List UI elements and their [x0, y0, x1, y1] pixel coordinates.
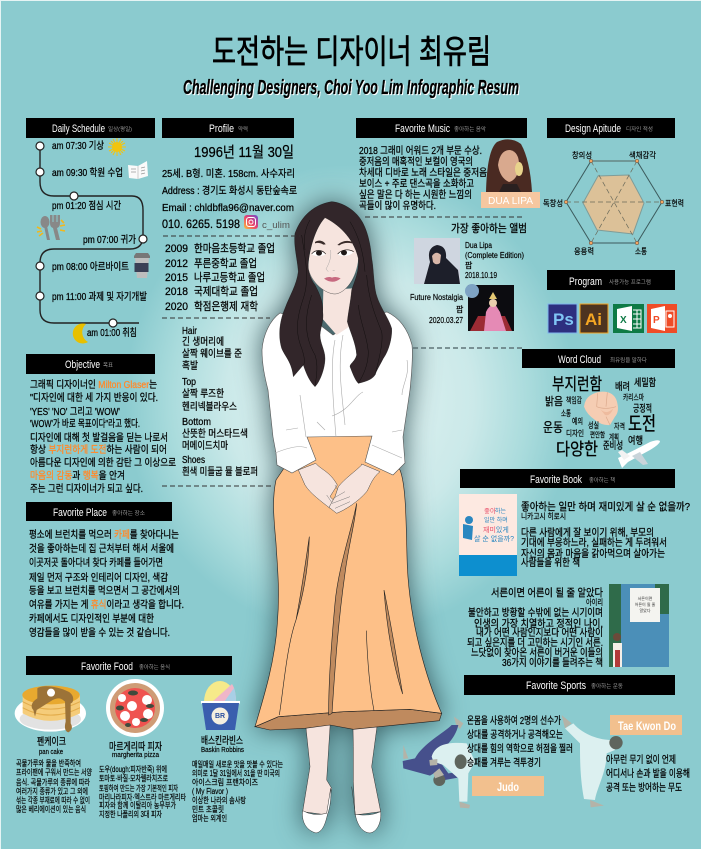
- place text: 제일 먼저 구조와 인테리어 디자인, 색감: [29, 572, 168, 584]
- pan cake description: 많은 베리에이션이 있는 음식: [16, 804, 86, 814]
- taekwondo description: 아무런 무기 없이 언제: [606, 753, 676, 766]
- personal details: [162, 167, 297, 231]
- book 2 description: 인생의 가장 치열하고 정적인 나이,: [474, 617, 603, 630]
- schedule entries: am 01:00 취침: [87, 327, 137, 339]
- word cloud words: 책임감: [566, 395, 582, 405]
- personal details: Address : 경기도 화성시 동탄숲속로: [162, 184, 297, 197]
- education history: [165, 242, 275, 313]
- panel: favorite place: [26, 502, 184, 639]
- panel: daily schedule: [26, 118, 155, 343]
- face and neck: [308, 217, 358, 335]
- judo description: 상대를 공격하거나 공격해오는: [467, 728, 563, 741]
- icon: moon: [73, 323, 88, 343]
- illustration: judo: [403, 717, 475, 808]
- favorite album heading: 가장 좋아하는 앨범: [451, 221, 527, 235]
- outfit description: Shoes: [182, 455, 205, 466]
- icon: book: [128, 161, 148, 179]
- margherita pizza label: margherita pizza: [112, 752, 159, 759]
- education history: 2009: [165, 243, 188, 255]
- schedule entries: pm 01:20 점심 시간: [52, 200, 121, 212]
- outfit description: 흑발: [182, 359, 198, 372]
- album info: Future Nostalgia: 팝: [456, 304, 464, 314]
- word cloud words: 긍정적: [633, 403, 652, 415]
- outfit description: Bottom: [182, 417, 211, 428]
- baskin robbins description: 의미로 1달 31일에서 31을 딴 미국의: [192, 768, 280, 778]
- word cloud words: 세밀함: [634, 377, 656, 389]
- title: 도전하는 디자이너 최유림: [212, 33, 491, 70]
- outfit description: 헨리넥블라우스: [182, 401, 237, 413]
- album cover: Future Nostalgia: [465, 284, 514, 331]
- panel: favorite book: [459, 469, 690, 669]
- book 2 description: 불안하고 방황할 수밖에 없는 시기이며: [468, 606, 603, 619]
- icon: spoon and fork: [37, 215, 65, 240]
- objective text: 디자인에 대해 첫 발걸음을 딛는 나로서: [30, 431, 168, 444]
- radar chart: 창의성: [572, 150, 592, 160]
- heading: daily schedule: 일상(평일): [108, 125, 132, 133]
- pan cake label: [37, 736, 66, 756]
- pan cake description: [16, 758, 92, 814]
- album info: Dua Lipa: 2018.10.19: [465, 271, 497, 280]
- heading: design aptitude: [547, 118, 675, 138]
- book 1 author: 니카고시 히로시: [521, 511, 566, 521]
- heading: favorite book: [460, 469, 675, 488]
- baskin robbins description: 매일매일 새로운 맛을 맛볼 수 있다는: [192, 759, 283, 769]
- heading: word cloud: [522, 349, 675, 368]
- icon: ice cream: [201, 681, 240, 730]
- blouse: [262, 312, 412, 475]
- music text: 싶은 말은 다 하는 시원한 느낌의: [359, 188, 472, 201]
- baskin robbins description: ( My Flavor ): [192, 787, 228, 796]
- heading: favorite food: Favorite Food: [81, 661, 133, 673]
- album info: Dua Lipa: (Complete Edition): [465, 251, 524, 260]
- hair: [280, 202, 392, 387]
- baskin robbins description: 아이스크림 프랜차이즈: [192, 777, 258, 787]
- heading: design aptitude: Design Apitude: [565, 123, 621, 135]
- margherita pizza description: 토마토·바질·모차렐라치즈로: [99, 773, 168, 783]
- margherita pizza label: [109, 741, 162, 759]
- baskin robbins label: Baskin Robbins: [201, 747, 244, 754]
- icon: Illustrator: Ai: [585, 310, 602, 329]
- figure: woman illustration: [255, 202, 442, 833]
- panel: profile: [162, 118, 300, 486]
- music text: [359, 144, 487, 212]
- book 1 description: 기대에 부응하느라, 실패하는 게 두려워서: [521, 536, 667, 549]
- place text: 여유를 가지는 게 휴식이라고 생각을 합니다.: [29, 599, 184, 611]
- pan cake description: 섞는 각종 부재료에 따라 수 없이: [16, 795, 90, 805]
- radar chart: 응용력: [574, 246, 594, 256]
- pan cake description: 여러가지 종류가 있고 그 외에: [16, 786, 88, 796]
- place text: 것을 좋아하는데 집 근처부터 해서 서울에: [29, 542, 174, 555]
- book cover 2: 서른이면: [638, 595, 653, 601]
- judo description: 승패를 겨루는 격투경기: [467, 756, 541, 769]
- pan cake description: 프라이팬에 구워서 만드는 서양: [16, 767, 92, 777]
- margherita pizza description: 피자와 함께 이탈리아 농무부가: [99, 800, 176, 810]
- margherita pizza description: 토핑하여 만드는 가장 기본적인 피자: [99, 783, 178, 793]
- album info: Dua Lipa: Dua Lipa: [465, 241, 492, 250]
- word cloud words: 배려: [615, 381, 630, 393]
- objective text: 그래픽 디자이너인 Milton Glaser는: [30, 379, 157, 391]
- pan cake label: pan cake: [39, 749, 63, 756]
- album info: Future Nostalgia: [410, 293, 464, 325]
- panel: objective: [26, 354, 176, 495]
- heading: daily schedule: [26, 118, 155, 138]
- pan cake description: 음식. 곡물가루의 종류에 따라: [16, 777, 90, 787]
- illustration: taekwondo: [562, 715, 623, 807]
- icon: pancake: [15, 686, 86, 732]
- heading: objective: 목표: [103, 362, 113, 369]
- book 2 title: 서른이면 어른이 될 줄 알았다: [491, 587, 603, 599]
- music text: 중저음의 매혹적인 보컬이 영국의: [359, 155, 473, 168]
- word cloud words: 소통: [561, 409, 571, 418]
- book cover 2: 어른이 될 줄: [635, 601, 656, 607]
- personal details: Email : chldbfla96@naver.com: [162, 203, 294, 214]
- objective text: 주는 그런 디자이너가 되고 싶다.: [30, 483, 143, 495]
- outfit description: Top: [182, 377, 196, 388]
- margherita pizza description: 지정한 나폴리의 3대 피자: [99, 809, 162, 819]
- music text: 2018 그래미 어워드 2개 부문 수상.: [359, 144, 482, 157]
- education history: 국제대학교 졸업: [194, 285, 258, 298]
- skirt: [255, 433, 442, 730]
- baskin robbins label: [201, 735, 244, 754]
- album info: Dua Lipa: [465, 241, 524, 280]
- objective text: [30, 379, 176, 495]
- objective text: 'YES' 'NO' 그리고 'WOW': [30, 406, 120, 418]
- music text: 곡들이 많이 유명하다.: [359, 199, 436, 212]
- icon: coffee cup: [134, 253, 150, 278]
- objective text: 'WOW'가 바로 목표이다"라고 했다.: [30, 417, 140, 430]
- education history: 한마음초등학교 졸업: [194, 242, 275, 255]
- margherita pizza description: [99, 765, 186, 819]
- book 2 author: 아이리: [586, 597, 603, 607]
- heading: favorite book: Favorite Book: [530, 474, 582, 486]
- heading: favorite music: Favorite Music: [395, 123, 450, 135]
- heading: word cloud: Word Cloud: [558, 354, 601, 366]
- word cloud words: 다양한: [556, 440, 598, 459]
- pan cake label: 펜케이크: [37, 736, 66, 748]
- album info: Future Nostalgia: Future Nostalgia: [410, 293, 463, 302]
- place text: 영감들을 많이 받을 수 있는 것 같습니다.: [29, 627, 170, 639]
- album info: Future Nostalgia: 2020.03.27: [429, 316, 463, 325]
- icon: ice cream: BR: [215, 713, 225, 720]
- place text: [29, 529, 184, 639]
- word cloud words: 여행: [628, 435, 643, 447]
- book cover 2: [609, 584, 669, 667]
- heading: favorite food: [26, 656, 232, 675]
- heading: word cloud: 최유림을 말하다: [610, 356, 647, 364]
- outfit description: Hair: [182, 326, 198, 337]
- icon: sun: [108, 138, 126, 156]
- label: Judo: [472, 776, 544, 796]
- book 1 description: 자신의 몸과 마음을 갉아먹으며 살아가는: [521, 547, 665, 560]
- schedule entries: pm 08:00 아르바이트: [52, 261, 129, 273]
- word cloud words: [543, 375, 656, 459]
- personal details: 010. 6265. 5198: [162, 217, 240, 231]
- radar chart: [543, 150, 684, 256]
- heading: favorite sports: 좋아하는 운동: [591, 682, 623, 690]
- heading: daily schedule: Daily Schedule: [52, 123, 105, 135]
- heading: favorite food: 좋아하는 음식: [139, 663, 170, 671]
- outfit description: 산뜻한 머스타드색: [182, 428, 248, 440]
- book cover 1: 재미있게: [483, 525, 509, 534]
- panel: favorite sports: [403, 675, 690, 808]
- place text: 카페에서도 디자인적인 부분에 대한: [29, 613, 154, 625]
- panel: word cloud: [522, 349, 675, 468]
- place text: 이곳저곳 돌아다녀 찾다 카페를 들어가면: [29, 557, 163, 569]
- panel: design aptitude: [543, 118, 684, 256]
- baskin robbins description: [192, 759, 283, 823]
- education history: 2020: [165, 301, 188, 313]
- objective text: 아름다운 디자인에 의한 감탄 그 이상으로: [30, 457, 176, 469]
- baskin robbins description: 이상한 나라의 솜사탕: [192, 795, 246, 805]
- facial features: [309, 241, 356, 294]
- book 2 description: 내가 어떤 사람인지보다 어떤 사람이: [476, 626, 603, 639]
- judo description: 상대를 힘의 역학으로 허점을 찔러: [467, 742, 573, 755]
- book cover 1: 하는: [495, 507, 507, 515]
- education history: 학점은행제 재학: [194, 300, 258, 313]
- place text: 등을 보고 브런치를 먹으면서 그 공간에서의: [29, 585, 180, 597]
- word cloud words: 편안함: [590, 430, 605, 439]
- book 1 description: 사람들을 위한 책: [521, 556, 580, 569]
- heading: program: [547, 270, 675, 290]
- baskin robbins description: 엄마는 외계인: [192, 813, 227, 823]
- heading: favorite music: 좋아하는 음악: [454, 125, 486, 133]
- outfit description: [182, 326, 258, 478]
- icon: pizza: [106, 679, 164, 737]
- book 2 description: 36가지 이야기를 들려주는 책: [502, 657, 603, 669]
- heading: profile: [162, 118, 294, 138]
- heading: favorite sports: Favorite Sports: [526, 680, 586, 692]
- book cover 1: 살 순 없을까?: [474, 534, 514, 543]
- panel: program: [547, 270, 677, 333]
- word cloud words: 카리스마: [623, 393, 644, 402]
- book 1 description: 다른 사람에게 잘 보이기 위해, 부모의: [521, 526, 654, 539]
- schedule entries: am 09:30 학원 수업: [52, 166, 123, 179]
- education history: 나루고등학교 졸업: [194, 271, 265, 284]
- margherita pizza description: 마리나라피자·엑스트라 마르게리타: [99, 792, 186, 802]
- radar chart: 색채감각: [629, 150, 657, 160]
- taekwondo description: [606, 753, 690, 794]
- outfit description: 흰색 미들굽 뮬 블로퍼: [182, 466, 258, 478]
- education history: 2015: [165, 272, 188, 284]
- objective text: 마음의 감동과 행복을 안겨: [30, 470, 125, 482]
- word cloud words: 자격: [614, 421, 625, 431]
- heading: favorite place: Favorite Place: [53, 507, 107, 519]
- book cover 1: [459, 494, 517, 576]
- word cloud words: 디자인: [566, 428, 584, 438]
- radar chart: 독창성: [543, 199, 563, 208]
- outfit description: 머메이드치마: [182, 440, 228, 452]
- panel: favorite food: [15, 656, 283, 823]
- book cover 1: 좋아: [484, 506, 496, 515]
- word cloud words: 준비성: [603, 440, 623, 452]
- icon: PowerPoint: P: [653, 315, 660, 326]
- book cover 1: 일만 하며: [484, 516, 508, 524]
- margherita pizza description: 도우(dough:피자반죽) 위에: [99, 765, 167, 774]
- objective text: 항상 부지런하게 도전하는 사람이 되어: [30, 443, 167, 456]
- word cloud words: 성실: [588, 420, 599, 430]
- personal details: 25세. B형. 미혼. 158cm. 사수자리: [162, 167, 295, 180]
- margherita pizza label: 마르게리따 피자: [109, 741, 162, 753]
- legs and shoes: [302, 712, 381, 833]
- icon: instagram: [244, 215, 258, 229]
- heading: profile: Profile: [209, 123, 234, 135]
- place text: 평소에 브런치를 먹으러 카페를 찾아다니는: [29, 529, 179, 541]
- panel: favorite music: [356, 118, 540, 348]
- book 2 description: [467, 606, 603, 669]
- heading: favorite place: 좋아하는 장소: [112, 509, 145, 517]
- music text: 보이스 + 주로 댄스곡을 소화하고: [359, 177, 474, 190]
- music text: 차세대 디바로 노래 스타일은 중저음: [359, 167, 487, 179]
- heading: objective: [26, 354, 155, 374]
- timeline dots: [36, 142, 147, 327]
- heading: program: Program: [569, 276, 602, 288]
- radar chart: 소통: [635, 247, 647, 256]
- birth date: 1996년 11월 30일: [194, 144, 294, 161]
- icon: Excel: X: [620, 315, 627, 326]
- icon: airplane: [618, 440, 660, 468]
- word cloud words: 계획: [609, 432, 619, 442]
- icon: fist: [584, 392, 618, 425]
- word cloud words: 운동: [543, 420, 563, 435]
- book cover 2: 알았다: [639, 607, 651, 613]
- judo description: [467, 714, 573, 769]
- album cover: Dua Lipa: [414, 238, 460, 284]
- baskin robbins label: 배스킨라빈스: [201, 735, 243, 747]
- word cloud words: 밝음: [545, 395, 563, 408]
- schedule entries: am 07:30 기상: [52, 140, 104, 152]
- book 1 description: [521, 526, 667, 569]
- education history: 푸른중학교 졸업: [194, 257, 257, 270]
- radar chart: 표현력: [665, 198, 684, 208]
- education history: 2018: [165, 286, 188, 298]
- outfit description: 살짝 웨이브를 준: [182, 348, 242, 360]
- objective text: "디자인에 대한 세 가지 반응이 있다.: [30, 392, 158, 404]
- label: Tae Kwon Do: [610, 715, 682, 735]
- heading: program: 사용가능 프로그램: [609, 278, 651, 286]
- schedule entries: pm 11:00 과제 및 자기개발: [52, 291, 147, 303]
- judo description: 온몸을 사용하여 2명의 선수가: [467, 714, 561, 727]
- label: Tae Kwon Do: Tae Kwon Do: [618, 719, 676, 733]
- book 2 description: 되고 싶은지를 더 고민하는 시기인 서른.: [467, 636, 603, 649]
- heading: favorite music: [356, 118, 527, 138]
- label: DUA LIPA: DUA LIPA: [488, 195, 533, 207]
- schedule entries: pm 07:00 귀가: [83, 234, 136, 246]
- education history: 2012: [165, 258, 188, 270]
- label: Judo: Judo: [497, 780, 519, 794]
- schedule entries: [52, 140, 147, 339]
- outfit description: 살짝 루즈한: [182, 388, 224, 400]
- word cloud words: 예의: [572, 416, 583, 426]
- book 2 description: 느닷없이 찾아온 서른이 버거운 이들의: [471, 646, 603, 659]
- photo: Dua Lipa: [486, 139, 532, 192]
- word cloud words: 도전: [628, 413, 656, 435]
- album info: Dua Lipa: 팝: [465, 260, 473, 270]
- pan cake description: 곡물가루와 물을 반죽하여: [16, 758, 81, 768]
- heading: favorite sports: [464, 675, 675, 695]
- label: DUA LIPA: [481, 192, 540, 208]
- heading: favorite place: [26, 502, 172, 521]
- icon: Photoshop: Ps: [553, 310, 574, 329]
- heading: favorite book: 좋아하는 책: [589, 476, 615, 484]
- heading: profile: 약력: [238, 125, 248, 133]
- baskin robbins description: 민트 초콜릿: [192, 804, 224, 814]
- word cloud words: 부지런함: [552, 375, 602, 394]
- heading: design aptitude: 디자인 적성: [626, 125, 653, 133]
- outfit description: 긴 생머리에: [182, 336, 224, 348]
- hands: [298, 463, 380, 513]
- heading: objective: Objective: [65, 359, 100, 371]
- timeline line: [40, 146, 143, 323]
- instagram handle: c_ulim: [262, 220, 290, 230]
